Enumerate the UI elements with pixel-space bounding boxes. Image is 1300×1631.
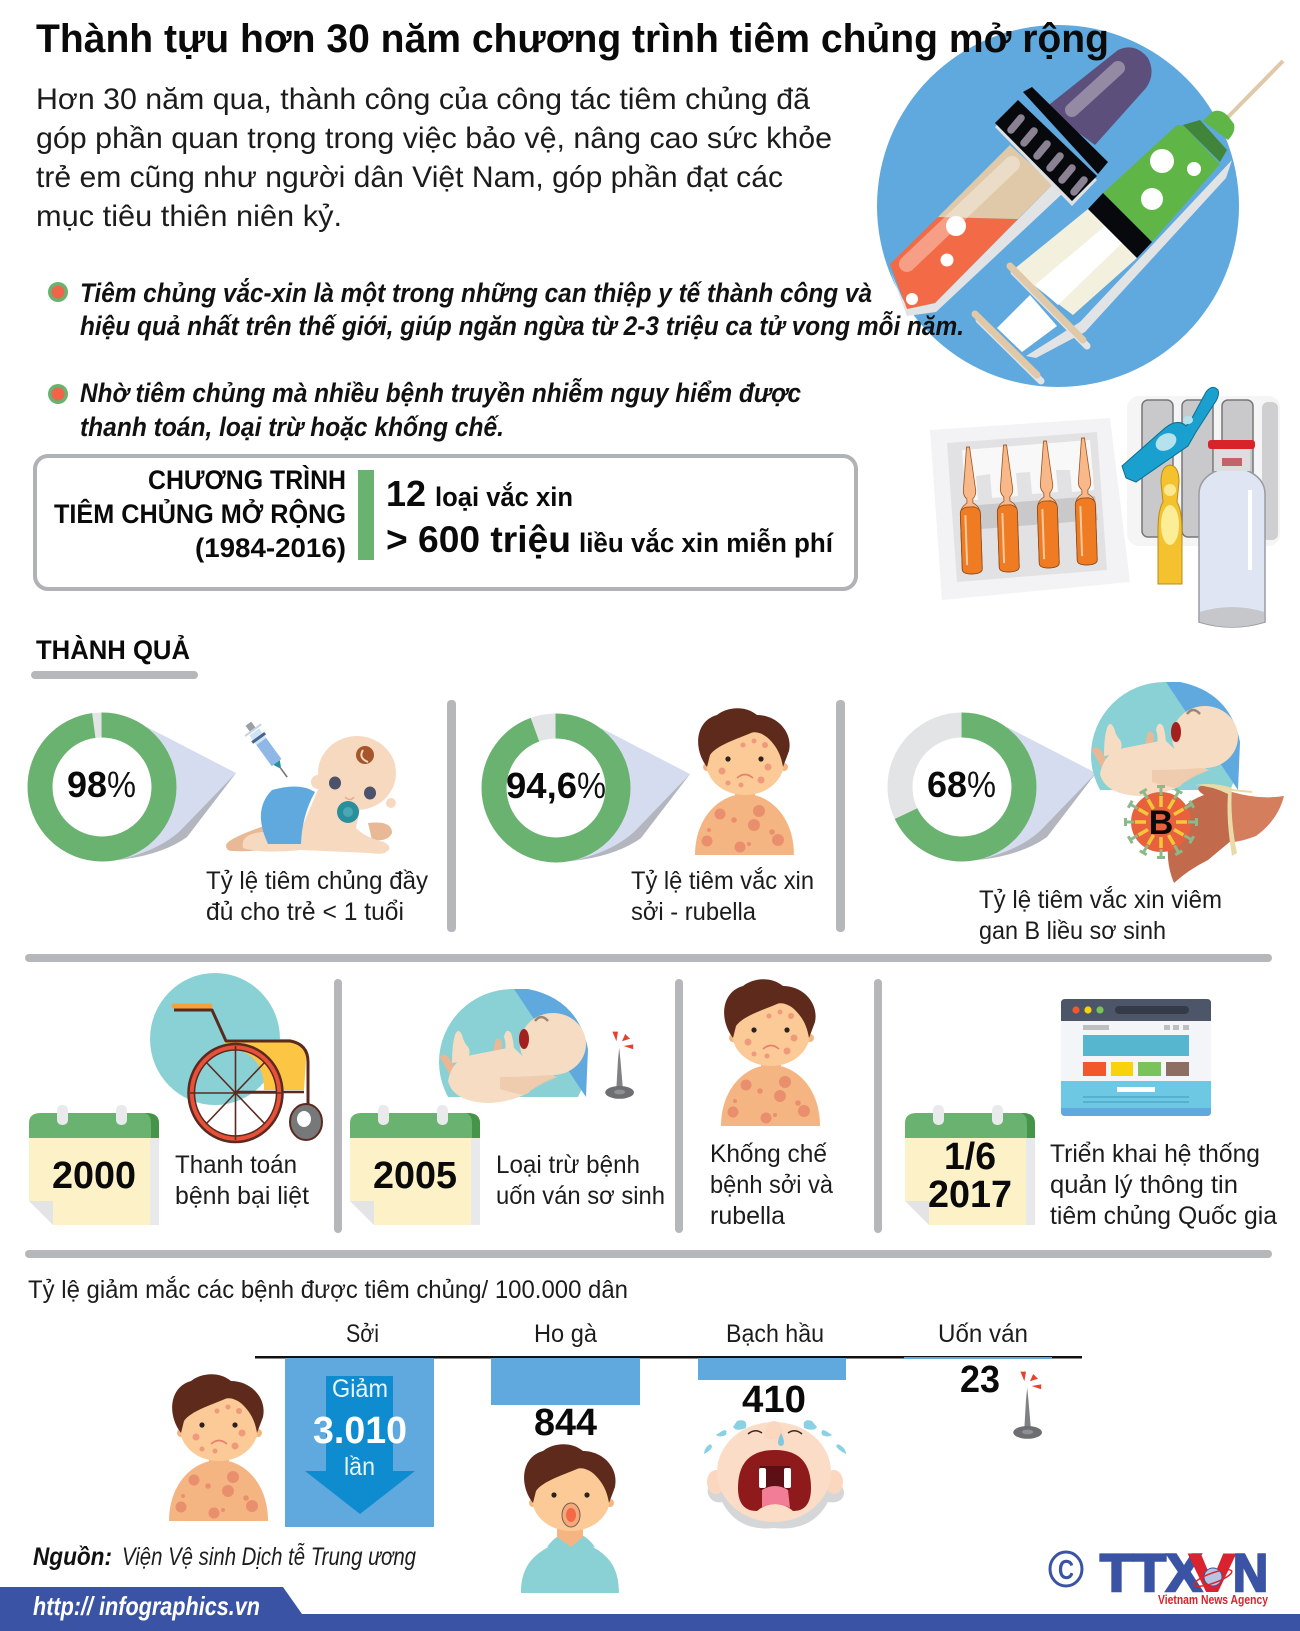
caption: Tỷ lệ tiêm vắc xin viêm: [979, 885, 1222, 914]
source: [33, 1542, 416, 1571]
icon: ampoule tray: [930, 418, 1130, 600]
bar: measles: Giảm: [332, 1375, 388, 1403]
bullet: first key fact: Tiêm chủng vắc-xin là một trong những can thiệp y tế thành công và: [80, 277, 872, 308]
heading: achievements: [31, 633, 198, 679]
caption: đủ cho trẻ < 1 tuổi: [206, 898, 404, 926]
footer bar: http:// infographics.vn: [33, 1591, 260, 1621]
bar chart: disease reduction: [255, 1320, 1082, 1527]
source: Nguồn:: [33, 1543, 112, 1571]
intro paragraph: mục tiêu thiên niên kỷ.: [36, 200, 342, 233]
intro paragraph: Hơn 30 năm qua, thành công của công tác tiêm chủng đã: [36, 83, 810, 116]
chart heading: Tỷ lệ giảm mắc các bệnh được tiêm chủng/ 100.000 dân: [28, 1275, 628, 1304]
programme name: (1984-2016): [195, 533, 346, 563]
milestone: 2000 polio: [29, 973, 322, 1225]
icon: calendar 2005: [350, 1105, 480, 1225]
icon: boy with rash: [695, 708, 794, 855]
title: Thành tựu hơn 30 năm chương trình tiêm chủng mở rộng: [36, 17, 1109, 61]
donut chart 68%: %: [967, 764, 996, 805]
icon: blue ampoule: [1122, 387, 1218, 482]
column labels: [346, 1320, 1028, 1348]
logo: TTXVN: V: [1189, 1544, 1235, 1603]
icon: coughing boy: [521, 1444, 619, 1593]
icon: crawling baby: [226, 736, 396, 854]
icon: boy with rash: [721, 979, 820, 1126]
caption: Loại trừ bệnh: [496, 1151, 640, 1179]
bullet: first key fact: hiệu quả nhất trên thế giới, giúp ngăn ngừa từ 2-3 triệu ca tử vong mỗi năm.: [80, 310, 964, 341]
donut chart 68%: 68: [927, 764, 967, 805]
donut chart 94,6%: [482, 714, 690, 862]
bar: diphtheria: 410: [742, 1379, 806, 1421]
donut chart 98%: 98: [67, 764, 107, 805]
intro paragraph: trẻ em cũng như người dân Việt Nam, góp phần đạt các: [36, 161, 783, 194]
caption: uốn ván sơ sinh: [496, 1182, 665, 1210]
summary box: expanded immunization programme: [35, 456, 856, 589]
donut chart 94,6%: 94,6: [506, 765, 577, 806]
date: 2017: [928, 1174, 1012, 1216]
caption: rubella: [710, 1202, 785, 1230]
bar: diphtheria: [698, 1358, 846, 1421]
icon: liver: [1168, 784, 1284, 883]
date: [928, 1136, 1012, 1216]
bar: measles: [285, 1358, 434, 1527]
caption: bệnh sởi và: [710, 1171, 833, 1199]
milestone: 2005 neonatal tetanus: [350, 989, 665, 1225]
illustration: syringe and dropper on blue circle: [877, 25, 1283, 387]
icon: syringe: [975, 61, 1283, 381]
icon: calendar 2017: [905, 1105, 1035, 1225]
milestone: measles and rubella control: [710, 979, 833, 1230]
programme numbers: loại vắc xin: [435, 481, 573, 512]
caption: [175, 1151, 309, 1210]
icon: newborn: [1091, 682, 1240, 828]
milestone: 1/6/2017 national information system: [905, 999, 1277, 1230]
programme name: [54, 464, 346, 563]
icon: wheelchair: [150, 973, 322, 1142]
icon: syringe small: [240, 718, 295, 783]
intro paragraph: [36, 83, 832, 233]
bullet: second key fact: Nhờ tiêm chủng mà nhiều bệnh truyền nhiễm nguy hiểm được: [80, 377, 801, 408]
bar: measles: 3.010: [313, 1410, 407, 1452]
icon: yellow ampoule: [1158, 465, 1182, 584]
icon: hepatitis B virus: [1124, 785, 1198, 859]
logo: TTXVN: Vietnam News Agency: [1158, 1593, 1268, 1607]
caption: [1050, 1140, 1277, 1230]
logo: TTXVN: [1050, 1544, 1268, 1607]
programme name: CHƯƠNG TRÌNH: [148, 464, 346, 495]
caption: [710, 1140, 833, 1230]
panel: 68% hepatitis B: [888, 682, 1284, 945]
caption: gan B liều sơ sinh: [979, 917, 1166, 945]
bar: measles: lần: [344, 1453, 375, 1481]
caption: [979, 885, 1222, 945]
caption: Triển khai hệ thống: [1050, 1140, 1260, 1168]
caption: quản lý thông tin: [1050, 1171, 1238, 1199]
logo: TTXVN: N: [1233, 1544, 1268, 1603]
donut chart 68%: [888, 713, 1096, 861]
column labels: Ho gà: [534, 1320, 597, 1348]
column labels: Uốn ván: [938, 1320, 1028, 1348]
illustration: vials and ampoules: [930, 387, 1280, 627]
caption: sởi - rubella: [631, 898, 756, 926]
caption: [206, 867, 428, 926]
footer bar: [0, 1587, 1300, 1631]
logo: TTXVN: C: [1058, 1554, 1074, 1585]
icon: dropper: [890, 47, 1152, 316]
caption: tiêm chủng Quốc gia: [1050, 1202, 1277, 1230]
caption: [496, 1151, 665, 1210]
icon: browser window: [1061, 999, 1211, 1116]
icon: glass bottle: [1199, 440, 1265, 627]
bullet: second key fact: [48, 377, 801, 442]
icon: boy with rash: [169, 1374, 268, 1521]
programme numbers: > 600 triệu: [386, 519, 571, 560]
source: Viện Vệ sinh Dịch tễ Trung ương: [122, 1542, 416, 1571]
logo: TTXVN: TTX: [1100, 1544, 1202, 1603]
programme numbers: liều vắc xin miễn phí: [579, 527, 834, 558]
programme numbers: [386, 473, 834, 560]
icon: nail: [605, 1032, 634, 1099]
caption: Tỷ lệ tiêm vắc xin: [631, 866, 814, 895]
icon: crying baby: [704, 1420, 846, 1528]
bar: whooping cough: [491, 1358, 640, 1444]
caption: bệnh bại liệt: [175, 1182, 309, 1210]
icon: newborn: [439, 989, 588, 1135]
caption: Thanh toán: [175, 1151, 297, 1179]
heading: achievements: THÀNH QUẢ: [36, 633, 190, 665]
icon: nail: [1013, 1372, 1042, 1439]
icon: hepatitis B virus: B: [1149, 804, 1173, 842]
donut chart 94,6%: %: [577, 765, 606, 806]
bar: whooping cough: 844: [534, 1402, 597, 1444]
donut chart 98%: [28, 713, 236, 861]
bar: tetanus: 23: [960, 1359, 1000, 1401]
caption: Khống chế: [710, 1140, 827, 1168]
bullet: second key fact: thanh toán, loại trừ hoặc khống chế.: [80, 412, 504, 442]
programme numbers: 12: [386, 473, 426, 514]
programme name: TIÊM CHỦNG MỞ RỘNG: [54, 497, 346, 529]
date: 1/6: [944, 1136, 996, 1178]
column labels: Bạch hầu: [726, 1320, 824, 1348]
caption: [631, 866, 814, 926]
caption: Tỷ lệ tiêm chủng đầy: [206, 867, 428, 895]
donut chart 98%: %: [107, 764, 136, 805]
bullet: first key fact: [48, 277, 964, 341]
year: 2005: [373, 1155, 457, 1197]
year: 2000: [52, 1155, 136, 1197]
icon: calendar 2000: [29, 1105, 159, 1225]
panel: 94,6% measles-rubella: [482, 708, 814, 926]
panel: 98% full immunization: [28, 713, 428, 926]
icon: second tray: [1127, 396, 1280, 546]
intro paragraph: góp phần quan trọng trong việc bảo vệ, nâng cao sức khỏe: [36, 122, 832, 155]
column labels: Sởi: [346, 1320, 379, 1348]
